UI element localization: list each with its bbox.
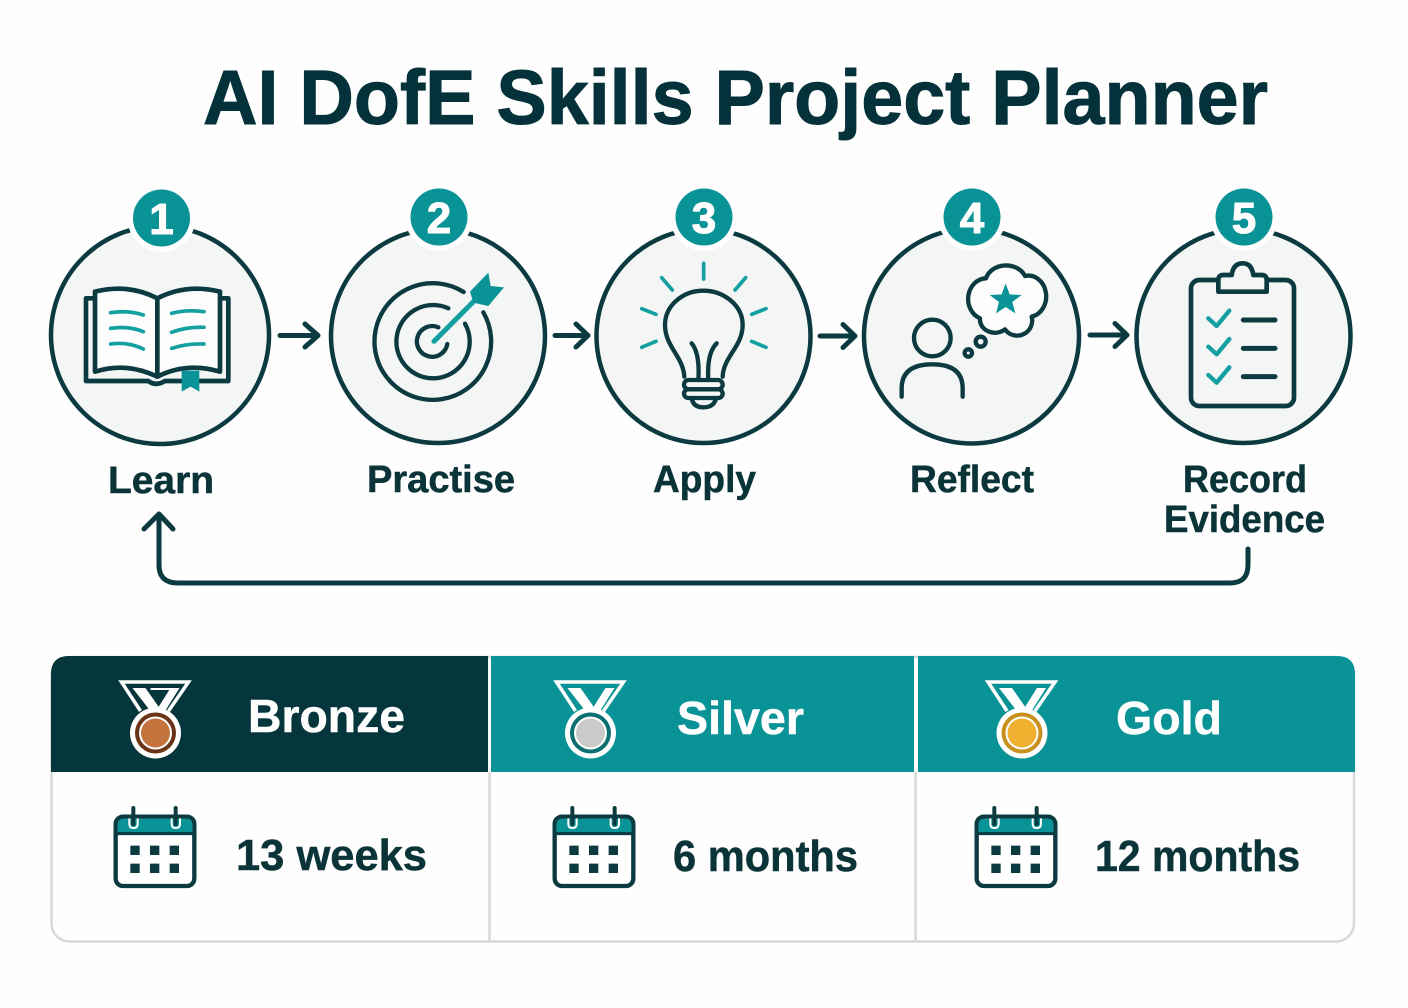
icon: light bulb (642, 263, 766, 407)
step 3: Apply (596, 183, 810, 501)
step 2 label: Practise (367, 459, 515, 501)
step 1: Learn (51, 184, 269, 502)
arrow: loop from record evidence back to learn (144, 514, 1248, 583)
icon: person with thought cloud (902, 265, 1046, 397)
step 3 circle (596, 229, 810, 443)
silver column (491, 656, 914, 886)
gold label: Gold (1116, 692, 1222, 744)
step 4 number badge (938, 183, 1006, 251)
icon: calendar (977, 808, 1055, 886)
silver label: Silver (677, 692, 804, 744)
icon: gold medal (988, 682, 1055, 758)
icon: open book (86, 289, 228, 392)
bronze duration: 13 weeks (236, 831, 427, 880)
step 4: Reflect (864, 183, 1079, 501)
title: AI DofE Skills Project Planner (203, 55, 1268, 141)
step 1 number badge (128, 184, 196, 252)
step 5 number badge: 5 (1232, 194, 1256, 243)
step 1 number badge: 1 (149, 195, 174, 244)
silver duration: 6 months (673, 832, 858, 881)
icon: silver medal (556, 682, 624, 758)
step 2 number badge (405, 183, 473, 251)
arrow: apply to reflect (820, 324, 855, 348)
panel: award levels table (51, 656, 1355, 942)
gold column (918, 656, 1355, 886)
step 4 label: Reflect (910, 459, 1034, 501)
step 4 number badge: 4 (960, 194, 985, 243)
arrow: practise to apply (555, 324, 588, 347)
silver header (491, 656, 914, 772)
icon: calendar (116, 808, 194, 886)
arrow: reflect to record evidence (1090, 324, 1127, 346)
icon: clipboard checklist (1191, 263, 1294, 406)
icon: target and arrow (374, 273, 504, 400)
bronze label: Bronze (248, 690, 405, 742)
step 5: Record Evidence (1136, 183, 1350, 541)
step 5 label: Evidence (1164, 499, 1325, 541)
step 2: Practise (331, 183, 545, 501)
arrow: learn to practise (280, 324, 318, 347)
step 2 circle (331, 229, 545, 443)
table body (52, 657, 1354, 942)
step 3 label: Apply (653, 459, 756, 501)
step 4 circle (864, 228, 1079, 444)
step 5 label (1164, 459, 1325, 541)
gold duration: 12 months (1095, 832, 1300, 881)
step 5 label: Record (1183, 459, 1307, 501)
step 3 number badge: 3 (692, 194, 716, 243)
bronze column (51, 656, 488, 886)
step 5 circle (1136, 229, 1350, 443)
step 5 number badge (1210, 183, 1278, 251)
icon: calendar (555, 808, 633, 886)
gold header (918, 656, 1355, 772)
step 1 label: Learn (108, 460, 214, 502)
step 1 circle (51, 226, 269, 444)
step 3 number badge (670, 183, 738, 251)
icon: bronze medal (122, 682, 188, 758)
bronze header (51, 656, 488, 772)
step 2 number badge: 2 (427, 194, 451, 243)
column dividers (490, 772, 916, 941)
